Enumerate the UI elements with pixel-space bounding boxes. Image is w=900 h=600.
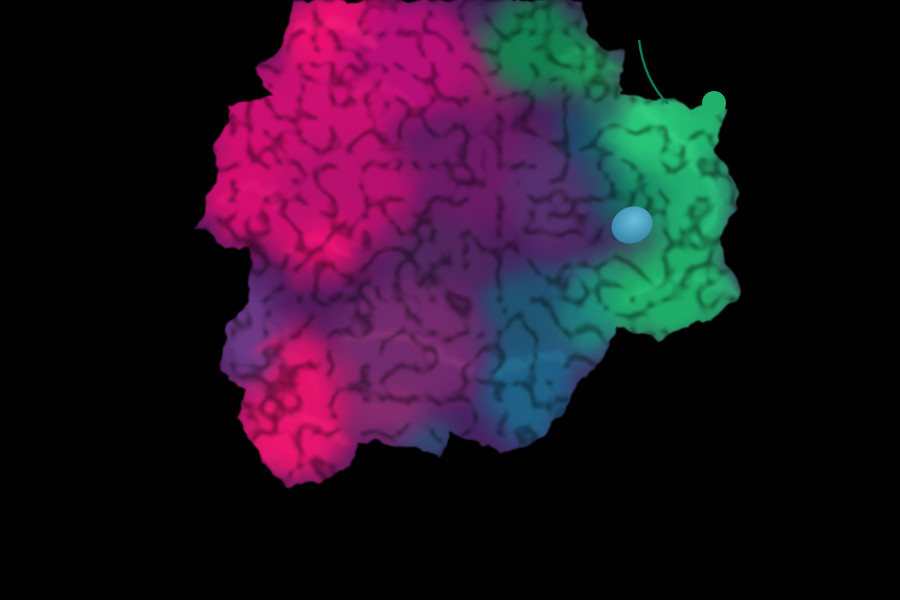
light blue blob <box>605 200 659 250</box>
magenta ink region <box>200 0 525 480</box>
purple ink region <box>220 115 592 441</box>
green tendril and tip <box>639 40 726 115</box>
ink cloud <box>180 0 760 500</box>
teal and blue ink region <box>400 103 626 454</box>
base ink body <box>180 0 760 500</box>
illustration: ink cloud on black background <box>194 0 742 489</box>
green ink region <box>480 0 740 347</box>
highlight folds <box>225 23 735 440</box>
